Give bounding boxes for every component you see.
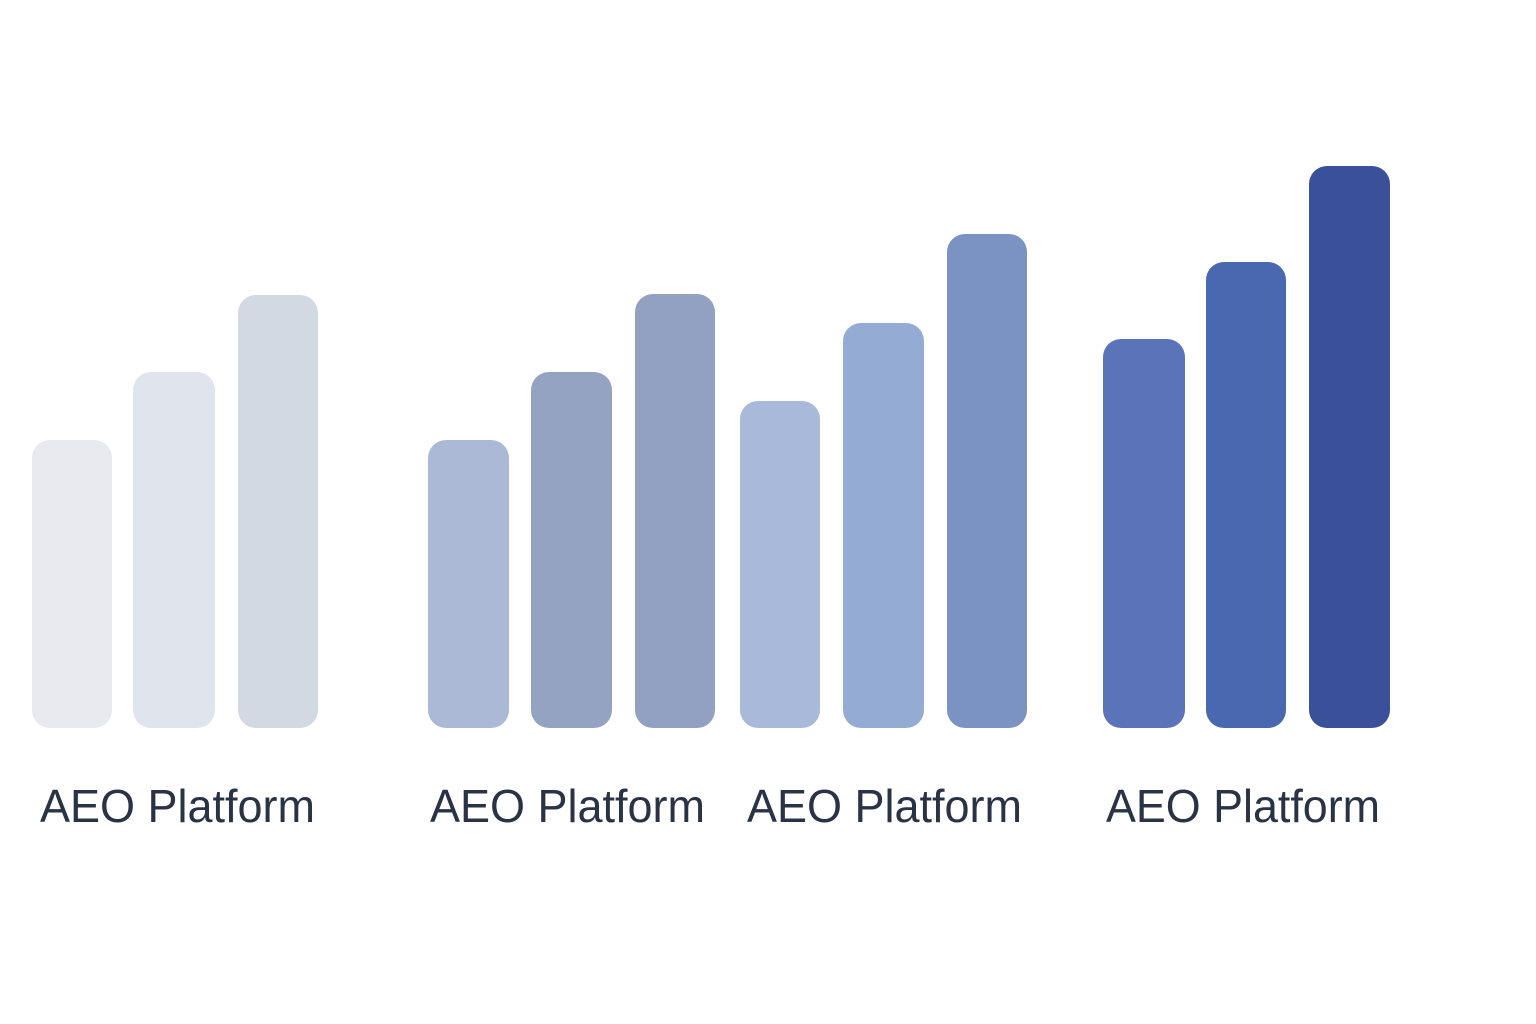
label 3: AEO Platform: [747, 780, 1022, 832]
label 2: AEO Platform: [430, 780, 705, 832]
bar group 1: [32, 295, 318, 728]
bar group 4: [1103, 166, 1390, 728]
bar group 2: [428, 294, 715, 728]
label 1: AEO Platform: [40, 780, 315, 832]
bar group 3: [740, 234, 1027, 728]
label 4: AEO Platform: [1106, 780, 1380, 832]
